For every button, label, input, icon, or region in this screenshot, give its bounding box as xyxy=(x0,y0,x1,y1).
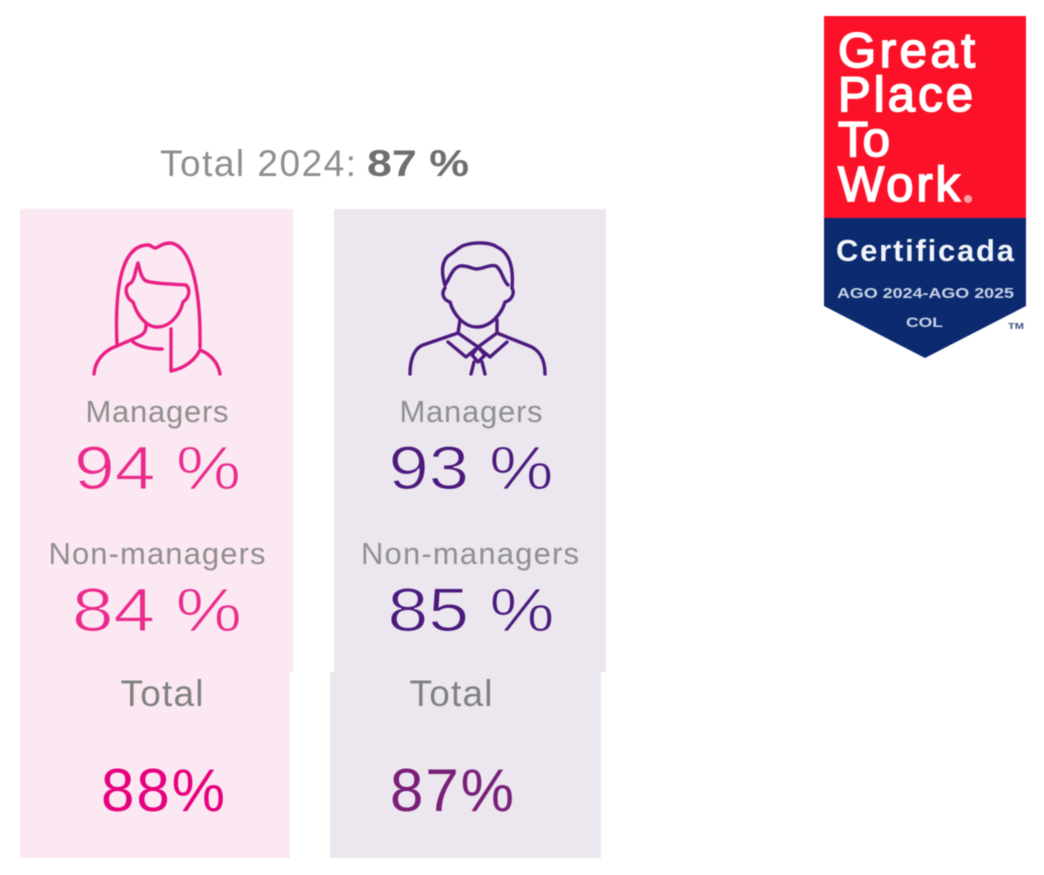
value: women managers: 94 % xyxy=(74,434,241,502)
value: women total: 88% xyxy=(101,757,225,824)
badge title xyxy=(838,24,975,212)
badge title: Place xyxy=(838,68,973,122)
icon: woman xyxy=(94,243,220,374)
label: women non-managers: Non-managers xyxy=(48,536,266,571)
badge certified label: Certificada xyxy=(836,233,1015,268)
label: women managers: Managers xyxy=(86,394,228,429)
badge: Great Place To Work certification xyxy=(824,16,1026,358)
value: men total: 87% xyxy=(390,757,514,824)
heading: total 2024: 87 % xyxy=(367,143,469,184)
badge trademark: TM xyxy=(1008,322,1024,331)
value: women non-managers: 84 % xyxy=(72,576,242,644)
label: men managers: Managers xyxy=(400,394,542,429)
value: men non-managers: 85 % xyxy=(388,576,554,644)
badge registered mark xyxy=(964,195,972,203)
panel: men xyxy=(330,209,606,858)
badge title: To xyxy=(838,113,890,167)
panel: women xyxy=(20,209,293,858)
label: women total: Total xyxy=(120,673,204,714)
label: men non-managers: Non-managers xyxy=(361,536,579,571)
badge dates: AGO 2024-AGO 2025 xyxy=(837,285,1014,302)
icon: man xyxy=(410,243,545,374)
value: men managers: 93 % xyxy=(388,434,554,502)
badge title: Work xyxy=(838,158,960,212)
badge title: Great xyxy=(838,24,975,78)
heading: total 2024 xyxy=(160,143,469,184)
heading: total 2024: Total 2024: xyxy=(160,143,356,184)
badge country: COL xyxy=(906,314,944,330)
label: men total: Total xyxy=(410,673,492,714)
